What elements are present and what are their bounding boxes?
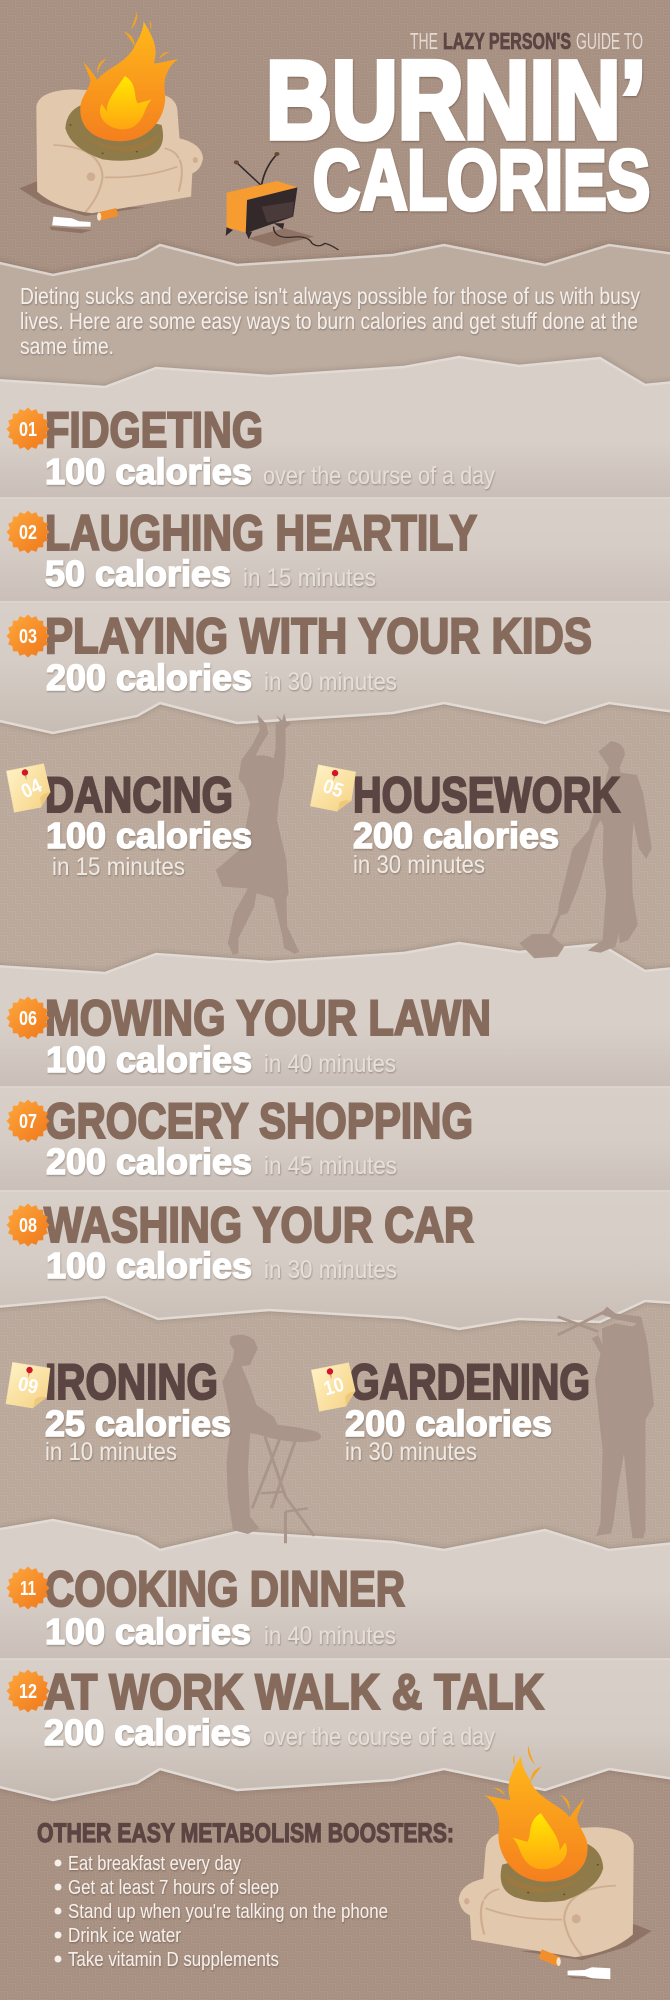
item 09: ironing: in 10 minutes: [45, 1438, 177, 1466]
item 12: at work walk and talk: over the course of a day: [263, 1723, 495, 1751]
item 04: dancing: 100 calories: [46, 815, 252, 856]
heading: the lazy person's guide to: THE: [410, 28, 438, 54]
panel: list one background: [0, 357, 670, 733]
icon: burning potato on couch, footer: [459, 1746, 652, 1960]
list: metabolism boosters: [54, 1853, 388, 1971]
item 06: mowing your lawn: MOWING YOUR LAWN: [45, 990, 491, 1046]
item 11: cooking dinner: COOKING DINNER: [45, 1561, 405, 1617]
badge 08: [6, 1204, 50, 1246]
badge 03: 03: [19, 626, 37, 648]
item 06: mowing your lawn: in 40 minutes: [264, 1050, 396, 1078]
item 06: mowing your lawn: 100 calories: [46, 1039, 252, 1080]
panel: patterned band with dancing and housework: [0, 690, 670, 990]
item 01: fidgeting: FIDGETING: [45, 402, 263, 458]
list: metabolism boosters: Drink ice water: [68, 1925, 181, 1947]
badge 08: 08: [19, 1215, 37, 1237]
intro text: same time.: [20, 333, 114, 359]
panel: footer: [0, 1765, 670, 2000]
list: metabolism boosters: Get at least 7 hours of sleep: [68, 1877, 279, 1899]
badge 07: [6, 1100, 50, 1142]
note 10: [311, 1363, 358, 1411]
intro text: [20, 283, 640, 359]
badge 11: 11: [20, 1578, 36, 1600]
silhouette: woman vacuuming: [519, 741, 652, 958]
item 02: laughing heartily: 50 calories: [45, 553, 231, 594]
badge 06: 06: [19, 1008, 37, 1030]
item 01: fidgeting: [6, 402, 495, 492]
item 10: gardening: [311, 1354, 590, 1466]
item 07: grocery shopping: 200 calories: [46, 1141, 252, 1182]
badge 06: [6, 996, 50, 1040]
item 12: at work walk and talk: [6, 1664, 544, 1753]
list: metabolism boosters: Stand up when you're talking on the phone: [68, 1901, 388, 1923]
heading: the lazy person's guide to: LAZY PERSON'S: [443, 28, 571, 54]
panel: list three background: [0, 1520, 670, 1800]
item 07: grocery shopping: in 45 minutes: [264, 1152, 397, 1180]
badge 11: [6, 1566, 50, 1610]
note 09: [6, 1362, 51, 1410]
item 08: washing your car: [6, 1197, 474, 1286]
item 10: gardening: GARDENING: [349, 1354, 590, 1410]
icon: television: [226, 152, 339, 250]
item 09: ironing: 25 calories: [45, 1403, 231, 1444]
item 04: dancing: in 15 minutes: [52, 853, 185, 881]
silhouette: dancer: [216, 713, 299, 955]
item 03: playing with your kids: [6, 608, 592, 698]
silhouette: man with hedge shears: [558, 1307, 654, 1538]
icon: bottle and can on the floor: [49, 208, 118, 233]
panel: intro: [0, 245, 670, 420]
background: header panel: [0, 0, 670, 400]
item 10: gardening: in 30 minutes: [345, 1438, 477, 1466]
list: metabolism boosters: Take vitamin D supplements: [68, 1949, 279, 1971]
item 04: dancing: [6, 764, 252, 881]
item 03: playing with your kids: in 30 minutes: [264, 668, 397, 696]
note 04: 04: [18, 774, 46, 803]
item 11: cooking dinner: [6, 1561, 405, 1652]
badge 07: 07: [19, 1111, 37, 1133]
panel: patterned band with ironing and gardening: [0, 1295, 670, 1560]
note 04: [6, 764, 53, 812]
item 02: laughing heartily: LAUGHING HEARTILY: [45, 505, 477, 561]
icon: can and bottle, footer: [539, 1949, 611, 1980]
item 12: at work walk and talk: 200 calories: [44, 1712, 251, 1753]
item 02: laughing heartily: in 15 minutes: [243, 564, 376, 592]
badge 12: [6, 1670, 50, 1712]
item 11: cooking dinner: 100 calories: [45, 1611, 251, 1652]
icon: burning potato on couch: [19, 12, 203, 216]
badge 01: 01: [19, 419, 37, 441]
list: metabolism boosters: Eat breakfast every day: [68, 1853, 241, 1875]
item 07: grocery shopping: GROCERY SHOPPING: [45, 1093, 473, 1149]
item 05: housework: [310, 765, 620, 879]
note 09: 09: [16, 1373, 40, 1399]
item 09: ironing: [6, 1354, 231, 1466]
heading: other easy metabolism boosters: OTHER EASY METABOLISM BOOSTERS:: [37, 1818, 454, 1848]
note 05: [310, 765, 357, 813]
item 03: playing with your kids: 200 calories: [46, 657, 252, 698]
badge 12: 12: [19, 1681, 37, 1703]
item 11: cooking dinner: in 40 minutes: [264, 1622, 396, 1650]
badge 01: [6, 408, 50, 450]
note 10: 10: [321, 1374, 347, 1400]
item 09: ironing: IRONING: [45, 1354, 218, 1410]
item 10: gardening: 200 calories: [345, 1403, 552, 1444]
item 01: fidgeting: 100 calories: [45, 451, 252, 492]
item 05: housework: in 30 minutes: [353, 851, 485, 879]
panel: list two background: [0, 943, 670, 1329]
badge 02: 02: [19, 522, 37, 544]
item 06: mowing your lawn: [6, 990, 491, 1080]
item 02: laughing heartily: [6, 505, 477, 594]
item 12: at work walk and talk: AT WORK WALK & TALK: [44, 1664, 544, 1720]
item 08: washing your car: 100 calories: [46, 1245, 252, 1286]
item 08: washing your car: WASHING YOUR CAR: [44, 1197, 474, 1253]
note 05: 05: [320, 775, 346, 803]
silhouette: woman ironing: [222, 1335, 321, 1543]
item 08: washing your car: in 30 minutes: [264, 1256, 397, 1284]
badge 03: [6, 614, 50, 658]
item 07: grocery shopping: [6, 1093, 473, 1182]
item 04: dancing: DANCING: [45, 767, 233, 823]
badge 02: [6, 510, 50, 554]
item 05: housework: 200 calories: [353, 815, 559, 856]
item 01: fidgeting: over the course of a day: [263, 462, 495, 490]
